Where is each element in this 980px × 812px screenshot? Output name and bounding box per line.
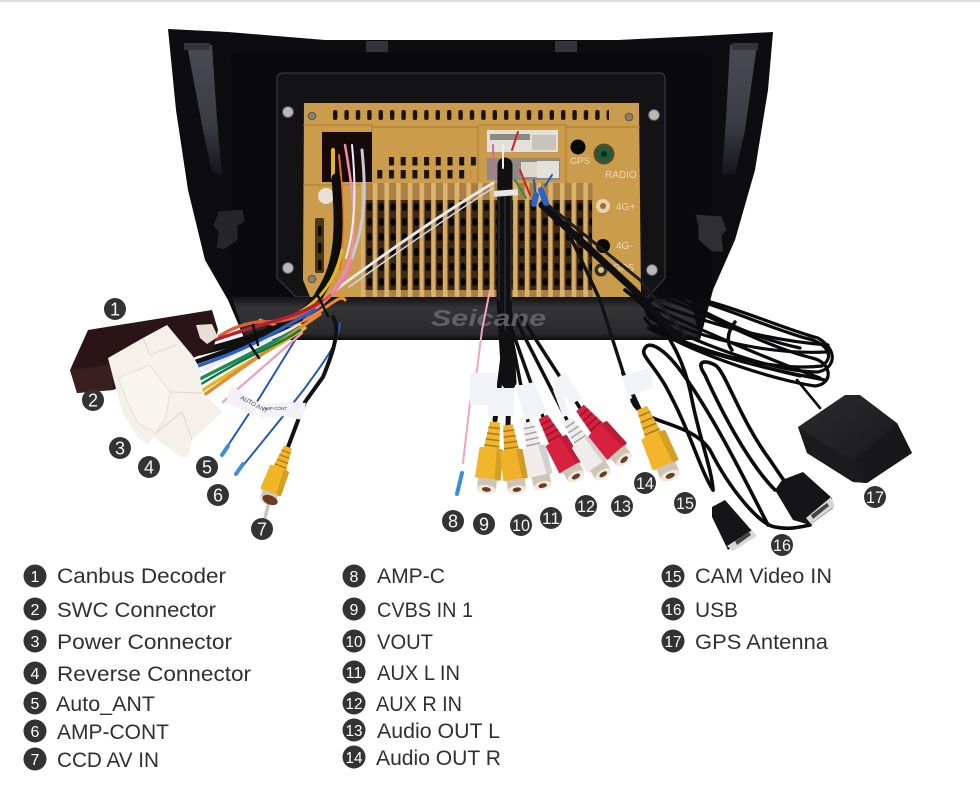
RCA: CAM Video IN [629, 403, 685, 486]
callout 2: 2 [88, 390, 98, 410]
harness to connector bundle [196, 295, 330, 398]
port labels: 4G+ [616, 202, 635, 213]
legend item 8: 8 [350, 569, 359, 586]
heat sink fins with holes [361, 200, 592, 290]
cable ties [250, 296, 328, 358]
legend item 14: Audio OUT R [376, 747, 501, 770]
legend item 6: AMP-CONT [57, 721, 169, 744]
labels on left wires: AUTO ANT [239, 395, 269, 415]
small coloured wires at main connector [493, 132, 552, 200]
bezel frame [168, 29, 773, 340]
wire 6 blue [237, 323, 340, 473]
legend item 13: 13 [346, 723, 363, 740]
callout 13: 13 [613, 497, 631, 516]
legend column 3 [662, 564, 832, 654]
callout 10: 10 [512, 516, 530, 535]
legend item 12: AUX R IN [376, 693, 462, 716]
white connectors [108, 325, 223, 458]
RCA: VOUT [496, 423, 530, 496]
port labels [570, 156, 637, 274]
GPS antenna puck [798, 395, 912, 483]
connector edges [143, 338, 203, 440]
legend item 1: 1 [31, 569, 40, 586]
callout 12: 12 [577, 497, 595, 516]
RCA: Audio OUT L [557, 413, 616, 485]
legend item 2: SWC Connector [57, 599, 216, 622]
port labels: 4G- [616, 241, 633, 252]
bottom bar [232, 297, 700, 340]
legend item 7: CCD AV IN [57, 749, 159, 772]
legend item 6: 6 [31, 724, 40, 741]
callout 15: 15 [676, 494, 694, 513]
callout 9: 9 [479, 514, 489, 534]
legend item 8: AMP-C [377, 565, 445, 588]
callout 3 [109, 437, 131, 459]
legend item 11 [342, 660, 460, 685]
callout 11: 11 [542, 509, 560, 528]
legend item 17: GPS Antenna [695, 631, 828, 654]
legend item 1: Canbus Decoder [57, 565, 226, 588]
canbus decoder box [70, 310, 218, 393]
main connector upper [487, 130, 558, 152]
blue caps [534, 190, 546, 204]
antenna tips [222, 446, 243, 474]
wire 5 blue [223, 337, 297, 453]
RCA: AUX L IN [516, 419, 556, 493]
top rule [0, 0, 980, 2]
cable 7 black [288, 317, 336, 447]
callout 11 [540, 507, 562, 529]
legend item 10: VOUT [377, 631, 433, 654]
callout 5 [196, 456, 218, 478]
left harness wires [260, 145, 364, 330]
legend item 9: CVBS IN 1 [377, 599, 473, 622]
legend item 5: Auto_ANT [56, 693, 155, 716]
callout 16: 16 [773, 536, 791, 555]
SWC and power connector body [108, 325, 223, 458]
left vent [315, 218, 324, 273]
GPS cable coil [645, 295, 832, 408]
watermark: Seicane [431, 305, 546, 331]
legend item 7 [24, 748, 159, 772]
callout 1 [104, 298, 126, 320]
callout 6: 6 [213, 486, 223, 506]
port 4G+ [596, 199, 610, 213]
left harness socket [322, 132, 372, 182]
main connector lower [487, 158, 560, 180]
bezel top tabs [184, 41, 758, 52]
heat sink fins [361, 183, 592, 200]
cable tie [494, 189, 518, 197]
AMP-C tip [457, 473, 462, 494]
RCA: AUX R IN [532, 411, 590, 487]
USB plug 2 [775, 472, 835, 525]
port labels: RADIO [605, 170, 637, 181]
callout 6 [207, 484, 229, 506]
callout 8 [442, 510, 464, 532]
port hole 4G- [596, 239, 610, 253]
legend item 10 [342, 630, 433, 654]
legend item 12: 12 [346, 696, 363, 713]
legend item 10: 10 [346, 634, 363, 651]
side mounting clip right [695, 214, 727, 252]
legend item 12 [342, 692, 462, 716]
legend item 17: 17 [664, 634, 682, 651]
legend item 4: Reverse Connector [57, 663, 251, 686]
legend item 16: 16 [664, 602, 682, 619]
middle vent slots [377, 157, 481, 178]
screws [282, 106, 660, 283]
legend item 16: USB [695, 599, 738, 622]
callout 17: 17 [866, 488, 884, 507]
labels on left wires: AMP-CONT [263, 406, 287, 411]
legend item 11: AUX L IN [377, 662, 460, 685]
black cables from main connector [495, 165, 685, 425]
callout 9 [473, 513, 495, 535]
USB plug 1 [712, 500, 757, 551]
chassis highlights [303, 125, 640, 297]
fin bottom [361, 290, 592, 297]
port radio [594, 144, 614, 164]
side mounting clip left [213, 209, 245, 250]
right wing lit patch [722, 45, 757, 175]
inner frame [277, 73, 665, 297]
legend item 15: 15 [664, 569, 682, 586]
round sticker [318, 188, 334, 204]
legend item 9 [342, 598, 473, 622]
power connector shaded face [118, 365, 170, 433]
gold chassis [303, 103, 641, 297]
wire pink [223, 333, 302, 402]
port hole GPS [570, 140, 586, 154]
RCA: CVBS IN 1 [473, 420, 508, 496]
white twin wire [296, 183, 493, 318]
callout 5: 5 [202, 458, 212, 478]
RCA connector labels [488, 368, 653, 420]
RCA: Audio OUT R [570, 400, 637, 472]
top vent slots [330, 108, 609, 122]
legend item 2: 2 [31, 602, 40, 619]
callout numbers on photo [82, 298, 886, 556]
callout 4: 4 [144, 458, 154, 478]
callout 8: 8 [448, 512, 458, 532]
callout 1: 1 [110, 300, 120, 320]
callout 7 [251, 518, 273, 540]
callout 14: 14 [636, 474, 654, 493]
legend item 14: 14 [346, 750, 363, 767]
AMP-C label [470, 373, 497, 405]
port labels: GPS [570, 156, 590, 167]
port labels: GPS [613, 263, 634, 274]
dark inner panel [231, 53, 712, 298]
legend item 5: 5 [31, 696, 40, 713]
port GPS [594, 264, 608, 276]
callout 7: 7 [257, 520, 267, 540]
plug: CCD AV IN [256, 443, 298, 518]
legend item 5 [24, 692, 155, 716]
labels on left wires [226, 386, 306, 420]
callout 2 [82, 389, 104, 411]
legend item 4: 4 [31, 666, 40, 683]
USB cables [625, 290, 810, 528]
legend item 3: 3 [31, 634, 40, 651]
legend item 16 [662, 598, 738, 622]
legend column 1 [24, 564, 251, 772]
head unit: rear view [168, 29, 773, 340]
callout 4 [138, 456, 160, 478]
legend item 15: CAM Video IN [695, 565, 832, 588]
legend item 3: Power Connector [57, 631, 232, 654]
left wing lit patch [187, 45, 222, 175]
legend item 11: 11 [346, 665, 363, 682]
legend item 8 [342, 564, 445, 588]
AMP-C pink wire [463, 290, 490, 463]
legend item 9: 9 [350, 602, 359, 619]
legend column 2 [342, 564, 501, 770]
callout 3: 3 [115, 438, 125, 458]
legend item 13: Audio OUT L [377, 720, 500, 743]
legend item 7: 7 [31, 752, 40, 769]
